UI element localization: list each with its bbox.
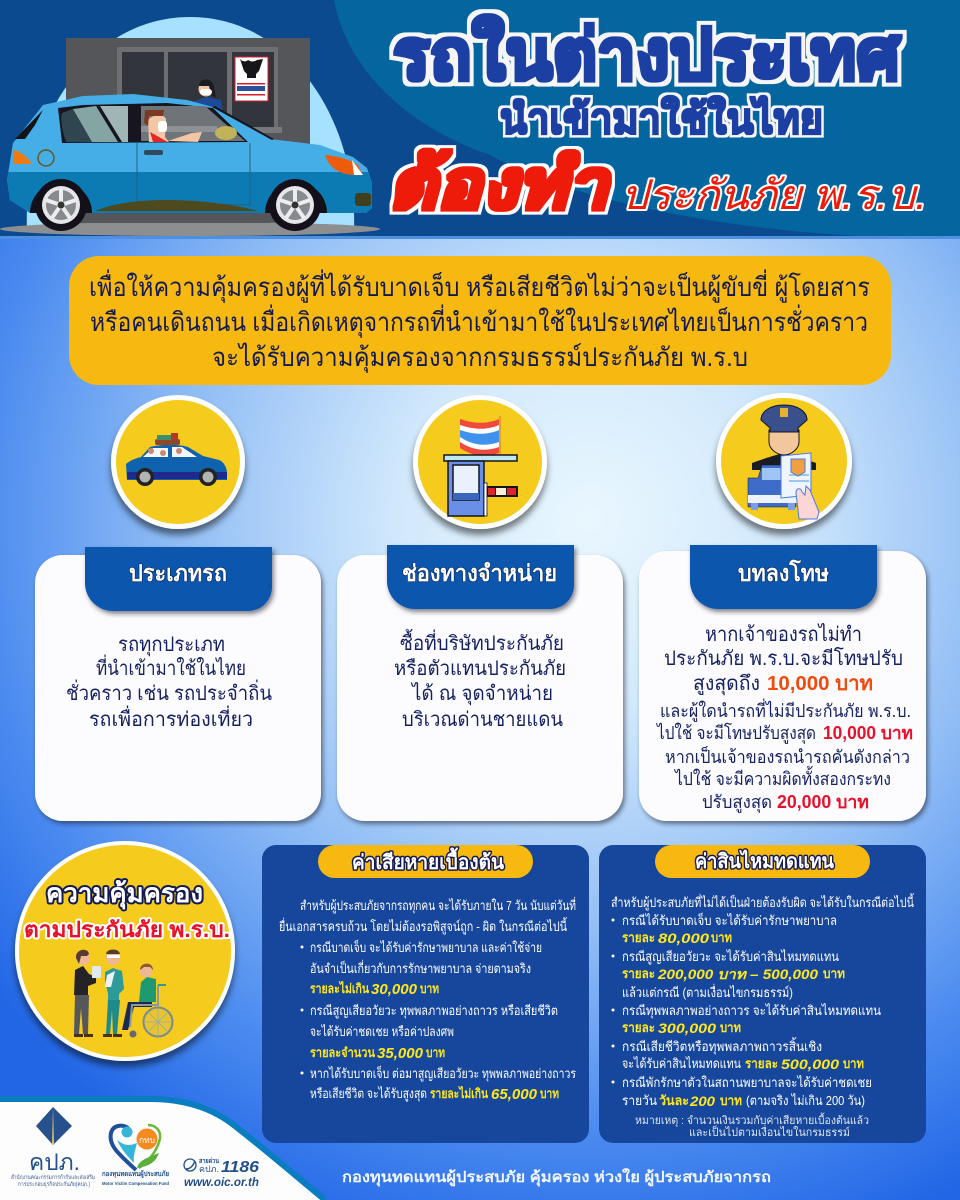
body text: วันละ xyxy=(659,1093,689,1108)
penalties text: หากเป็นเจ้าของรถนำรถคันดังกล่าว xyxy=(665,745,910,767)
intro callout: จะได้รับความคุ้มครองจากกรมธรรม์ประกันภัย พ.ร.บ xyxy=(212,342,748,373)
OIC logo: สำนักงานคณะกรรมการกำกับและส่งเสริม xyxy=(11,1174,95,1181)
vehicle type text: รถทุกประเภท xyxy=(118,634,225,657)
header banner xyxy=(0,0,960,239)
Motor Victim Compensation Fund logo: Motor Victim Compensation Fund xyxy=(102,1181,169,1186)
panel: preliminary damages xyxy=(262,845,589,1143)
body text: รายละไม่เกิน xyxy=(430,1085,488,1101)
body text: รายละ xyxy=(745,1056,778,1071)
penalties text: 10,000 บาท xyxy=(823,723,913,743)
body text: บาท xyxy=(843,1056,864,1071)
vehicle type text: ที่นำเข้ามาใช้ในไทย xyxy=(96,654,246,680)
pill heading xyxy=(655,845,870,878)
body text: กรณีเสียชีวิตหรือทุพพลภาพถาวรสิ้นเชิง xyxy=(622,1037,822,1055)
body text: รายละจำนวน xyxy=(310,1045,375,1060)
header tab: sales channels: ช่องทางจำหน่าย xyxy=(402,560,557,586)
sales channels text: ซื้อที่บริษัทประกันภัย xyxy=(400,629,564,655)
body text: รายละ xyxy=(622,1020,655,1035)
panel: compensation xyxy=(599,845,926,1143)
Motor Victim Compensation Fund logo: กองทุนทดแทนผู้ประสบภัย xyxy=(102,1169,169,1179)
body text: หรือเสียชีวิต จะได้รับสูงสุด xyxy=(310,1086,427,1102)
illustration: car at border booth xyxy=(0,17,380,236)
body text: กรณีสูญเสียอวัยวะ จะได้รับค่าสินไหมทดแทน xyxy=(622,949,839,965)
body text: รายละ xyxy=(622,966,655,981)
hotline and website: คปภ. xyxy=(199,1164,219,1174)
footer tagline: กองทุนทดแทนผู้ประสบภัย คุ้มครอง ห่วงใย ผู้ประสบภัยจากรถ xyxy=(342,1168,771,1187)
panel: sales channels xyxy=(337,545,623,821)
vehicle type text: รถเพื่อการท่องเที่ยว xyxy=(89,705,253,731)
penalties text: ประกันภัย พ.ร.บ.จะมีโทษปรับ xyxy=(664,647,903,670)
panel: vehicle type xyxy=(35,547,321,821)
coverage heading: ความคุ้มครอง xyxy=(46,878,203,910)
penalties text: หากเจ้าของรถไม่ทำ xyxy=(705,623,862,646)
body text: รายวัน xyxy=(622,1093,657,1108)
sales channels text xyxy=(394,629,566,731)
header tab: vehicle type xyxy=(85,547,272,611)
title must-do red: ต้องทำ xyxy=(388,147,611,223)
header tab: sales channels xyxy=(387,545,574,609)
illustration: agent and injured people xyxy=(74,950,172,1038)
vehicle type text xyxy=(66,634,272,731)
OIC logo xyxy=(11,1107,95,1188)
sales channels text: หรือตัวแทนประกันภัย xyxy=(394,658,566,680)
body text: 30,000 xyxy=(371,981,418,998)
body text: บาท xyxy=(540,1086,559,1101)
penalties text: 10,000 บาท xyxy=(767,673,873,695)
coverage circle xyxy=(15,841,235,1061)
footer xyxy=(0,1099,771,1200)
body text: อันจำเป็นเกี่ยวกับการรักษาพยาบาล จ่ายตามจริง xyxy=(310,959,531,976)
hotline and website: สายด่วน xyxy=(199,1157,219,1165)
hotline and website: www.oic.or.th xyxy=(184,1175,259,1189)
hotline and website xyxy=(184,1157,259,1189)
body text: รายละ xyxy=(622,930,655,945)
hotline and website: 1186 xyxy=(221,1159,259,1176)
Motor Victim Compensation Fund logo: กทบ xyxy=(139,1135,155,1145)
sales channels text: ได้ ณ จุดจำหน่าย xyxy=(410,682,553,706)
body text xyxy=(279,897,576,1103)
body text: บาท xyxy=(720,1020,741,1035)
header tab: penalties: บทลงโทษ xyxy=(738,559,829,586)
pill heading xyxy=(318,845,533,878)
ground shadow xyxy=(0,222,380,236)
title line 1: รถในต่างประเทศ xyxy=(393,14,902,94)
body text: บาท xyxy=(823,966,845,981)
penalties text: 20,000 บาท xyxy=(777,792,869,812)
icon: border checkpoint xyxy=(413,395,547,529)
intro callout: เพื่อให้ความคุ้มครองผู้ที่ได้รับบาดเจ็บ หรือเสียชีวิตไม่ว่าจะเป็นผู้ขับขี่ ผู้โดยสาร xyxy=(89,269,870,303)
penalties text xyxy=(655,623,913,813)
body text: หมายเหตุ : จำนวนเงินรวมกับค่าเสียหายเบื้องต้นแล้ว xyxy=(635,1112,869,1127)
Motor Victim Compensation Fund logo xyxy=(102,1125,169,1186)
body text: แล้วแต่กรณี (ตามเงื่อนไขกรมธรรม์) xyxy=(622,984,793,1000)
title line 2: นำเข้ามาใช้ในไทย xyxy=(500,95,823,142)
body text: รายละไม่เกิน xyxy=(310,980,369,996)
body text: (ตามจริง ไม่เกิน 200 วัน) xyxy=(746,1093,865,1108)
coverage subheading: ตามประกันภัย พ.ร.บ. xyxy=(24,917,230,942)
title compulsory insurance: ประกันภัย พ.ร.บ. xyxy=(621,172,927,218)
body text: กรณีสูญเสียอวัยวะ ทุพพลภาพอย่างถาวร หรือเสียชีวิต xyxy=(310,1003,558,1019)
wheels xyxy=(35,179,321,231)
body text: บาท xyxy=(420,981,439,996)
header tab: penalties xyxy=(690,545,877,609)
pill heading: ค่าเสียหายเบื้องต้น xyxy=(352,847,504,874)
body text: บาท xyxy=(426,1045,445,1060)
body text: และเป็นไปตามเงื่อนไขในกรมธรรม์ xyxy=(689,1124,850,1139)
body text: กรณีทุพพลภาพอย่างถาวร จะได้รับค่าสินไหมทดแทน xyxy=(622,1003,881,1019)
body text: หากได้รับบาดเจ็บ ต่อมาสูญเสียอวัยวะ ทุพพลภาพอย่างถาวร xyxy=(310,1064,576,1082)
intro callout xyxy=(69,256,891,385)
panel: penalties xyxy=(639,545,926,821)
intro callout: หรือคนเดินถนน เมื่อเกิดเหตุจากรถที่นำเข้ามาใช้ในประเทศไทยเป็นการชั่วคราว xyxy=(90,304,868,338)
body text: สำหรับผู้ประสบภัยจากรถทุกคน จะได้รับภายใน 7 วัน นับแต่วันที่ xyxy=(300,897,576,914)
icon: tourist car xyxy=(111,395,245,529)
body text: 80,000 xyxy=(658,930,709,946)
body text: 200 xyxy=(689,1093,715,1109)
body text: 300,000 xyxy=(658,1020,716,1036)
OIC logo: การประกอบธุรกิจประกันภัย(คปภ.) xyxy=(18,1181,90,1188)
icon: officer with fine xyxy=(716,393,852,529)
pill heading: ค่าสินไหมทดแทน xyxy=(695,849,834,873)
sales channels text: บริเวณด่านชายแดน xyxy=(402,709,563,731)
penalties text: และผู้ใดนำรถที่ไม่มีประกันภัย พ.ร.บ. xyxy=(660,698,911,722)
body text: 200,000 บาท – 500,000 xyxy=(657,966,818,982)
body text: จะได้รับค่าสินไหมทดแทน xyxy=(622,1056,741,1071)
penalties text: ไปใช้ จะมีโทษปรับสูงสุด xyxy=(655,722,816,744)
body text: 65,000 xyxy=(491,1086,538,1103)
body text xyxy=(611,893,914,1139)
vehicle type text: ชั่วคราว เช่น รถประจำถิ่น xyxy=(66,679,272,705)
body text: จะได้รับค่าชดเชย หรือค่าปลงศพ xyxy=(310,1024,454,1039)
penalties text: ปรับสูงสุด xyxy=(702,792,772,813)
body text: บาท xyxy=(720,1093,742,1108)
header tab: vehicle type: ประเภทรถ xyxy=(129,560,227,586)
body text: ยื่นเอกสารครบถ้วน โดยไม่ต้องรอพิสูจน์ถูก - ผิด ในกรณีต่อไปนี้ xyxy=(279,917,567,935)
penalties text: ไปใช้ จะมีความผิดทั้งสองกระทง xyxy=(673,766,891,789)
body text: กรณีบาดเจ็บ จะได้รับค่ารักษาพยาบาล และค่าใช้จ่าย xyxy=(310,938,542,955)
body text: บาท xyxy=(711,930,732,945)
body text: 35,000 xyxy=(377,1045,424,1062)
body text: กรณีพักรักษาตัวในสถานพยาบาลจะได้รับค่าชดเชย xyxy=(622,1075,872,1090)
penalties text: สูงสุดถึง xyxy=(693,673,760,696)
body text: 500,000 xyxy=(781,1056,839,1072)
OIC logo: คปภ. xyxy=(29,1149,80,1175)
body text: กรณีได้รับบาดเจ็บ จะได้รับค่ารักษาพยาบาล xyxy=(622,911,837,928)
